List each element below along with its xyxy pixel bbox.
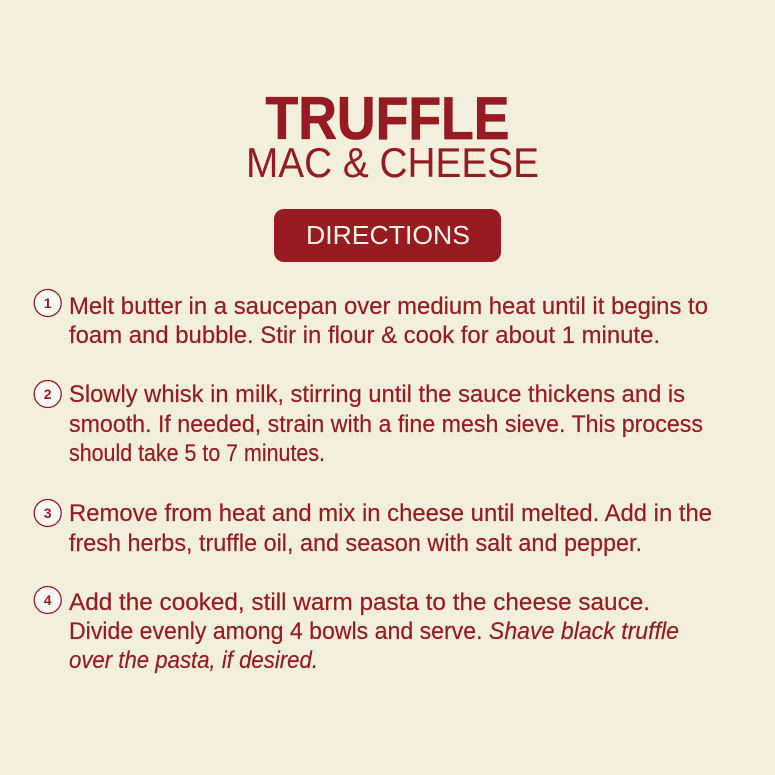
step 1: Melt butter in a saucepan over medium heat until it begins to <box>69 293 708 320</box>
title <box>246 85 539 186</box>
title: MAC & CHEESE <box>246 139 539 186</box>
step 3: Remove from heat and mix in cheese until melted. Add in the <box>69 500 712 527</box>
step 1: foam and bubble. Stir in flour & cook for about 1 minute. <box>69 322 660 349</box>
step 2: should take 5 to 7 minutes. <box>69 440 325 467</box>
step 1: 1 <box>44 295 52 311</box>
step 1 <box>34 290 708 349</box>
step 2: Slowly whisk in milk, stirring until the sauce thickens and is <box>69 381 685 408</box>
step 4: Divide evenly among 4 bowls and serve. Shave black truffle <box>69 618 679 645</box>
step 4: over the pasta, if desired. <box>69 647 318 674</box>
step 3: 3 <box>44 505 52 521</box>
directions badge: DIRECTIONS <box>306 220 470 250</box>
title: TRUFFLE <box>266 85 510 152</box>
step 4: Add the cooked, still warm pasta to the cheese sauce. <box>69 589 650 616</box>
step 2 <box>34 380 703 467</box>
directions badge <box>274 209 501 262</box>
step 2: smooth. If needed, strain with a fine mesh sieve. This process <box>69 411 703 438</box>
step 4: 4 <box>44 592 52 608</box>
step 3: fresh herbs, truffle oil, and season with salt and pepper. <box>69 530 642 557</box>
step 3 <box>34 500 712 557</box>
step 2: 2 <box>44 386 52 402</box>
step 4 <box>34 586 679 674</box>
